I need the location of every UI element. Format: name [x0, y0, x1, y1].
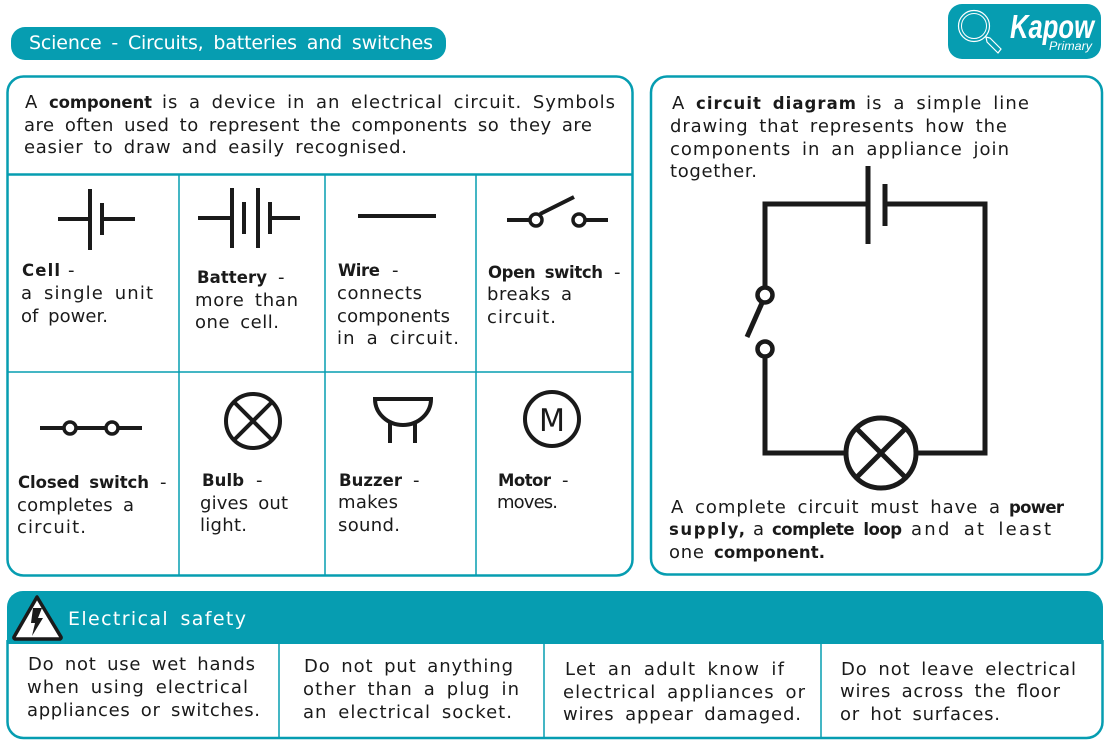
closed switch label: - — [160, 472, 166, 493]
icon: high voltage warning triangle — [14, 597, 61, 639]
component intro text: A — [25, 92, 38, 113]
open switch label: breaks a — [487, 284, 572, 305]
safety tip 2: Do not put anything — [304, 656, 513, 677]
battery label: one cell. — [195, 312, 279, 333]
circuit diagram — [747, 166, 985, 488]
buzzer label: Buzzer — [339, 471, 403, 490]
complete circuit text — [669, 497, 1065, 563]
motor label: - — [562, 470, 568, 491]
title banner — [11, 27, 446, 60]
component intro text: is a device in an electrical circuit. Symbols — [162, 92, 615, 113]
motor label: Motor — [498, 471, 552, 490]
complete circuit text: supply, — [669, 520, 745, 539]
wire label: - — [392, 260, 398, 281]
icon: motor symbol: M — [539, 403, 565, 439]
complete circuit text: and at least — [911, 519, 1051, 540]
closed switch label — [17, 472, 166, 538]
icon: wire symbol — [358, 214, 436, 218]
complete circuit text: component. — [714, 543, 825, 562]
open switch label — [487, 262, 620, 328]
complete circuit text: complete loop — [772, 520, 902, 539]
component intro text — [24, 92, 615, 158]
safety heading: Electrical safety — [68, 608, 246, 630]
wire label: connects — [337, 283, 422, 304]
safety tip 4: wires across the floor — [840, 681, 1061, 702]
circuit diagram intro text: together. — [670, 161, 757, 182]
bulb label: - — [256, 470, 262, 491]
logo: Kapow Primary — [948, 4, 1101, 59]
safety tip 3: wires appear damaged. — [563, 704, 801, 725]
circuit diagram intro text: drawing that represents how the — [670, 116, 1007, 137]
cell label: a single unit — [21, 283, 153, 304]
panel: electrical safety — [7, 591, 1103, 738]
icon: motor symbol — [525, 392, 579, 446]
buzzer label: - — [413, 470, 420, 491]
bulb label: Bulb — [202, 471, 244, 490]
circuit diagram intro text — [670, 93, 1029, 182]
complete circuit text: a — [753, 519, 764, 540]
closed switch label: Closed switch — [18, 473, 149, 492]
battery label: Battery — [197, 268, 267, 287]
buzzer label: makes — [338, 492, 398, 513]
safety tip 1 — [27, 654, 260, 721]
battery label: more than — [195, 290, 298, 311]
logo: Kapow Primary: Primary — [1049, 39, 1093, 53]
safety tip 4: or hot surfaces. — [840, 704, 1000, 725]
open switch label: - — [614, 262, 620, 283]
icon: bulb symbol — [226, 394, 280, 448]
title banner: Science - Circuits, batteries and switches — [29, 32, 433, 54]
cell label: Cell — [22, 261, 60, 280]
panel: components — [8, 76, 632, 576]
icon: cell symbol — [58, 189, 135, 250]
icon: buzzer symbol — [375, 399, 431, 443]
icon: battery symbol — [198, 188, 300, 248]
panel: circuit diagram — [651, 76, 1102, 574]
motor label: moves. — [497, 492, 558, 513]
buzzer label — [338, 470, 420, 536]
safety tip 4 — [840, 659, 1076, 725]
circuit diagram intro text: circuit diagram — [696, 94, 856, 113]
buzzer label: sound. — [338, 515, 400, 536]
safety tip 2: an electrical socket. — [303, 702, 512, 723]
icon: closed switch symbol — [40, 422, 142, 434]
safety tip 3 — [563, 659, 806, 725]
circuit diagram intro text: components in an appliance join — [670, 139, 1009, 160]
closed switch label: circuit. — [17, 517, 86, 538]
cell label: - — [68, 260, 74, 281]
wire label: components — [337, 306, 450, 327]
safety tip 2: other than a plug in — [303, 679, 519, 700]
safety tip 3: Let an adult know if — [565, 659, 785, 680]
complete circuit text: A complete circuit must have a — [671, 497, 1000, 518]
safety tip 3: electrical appliances or — [563, 682, 806, 703]
wire label: Wire — [338, 261, 380, 280]
circuit diagram intro text: A — [672, 93, 685, 114]
closed switch label: completes a — [17, 495, 134, 516]
battery label — [195, 267, 298, 333]
circuit diagram intro text: is a simple line — [866, 93, 1029, 114]
cell label — [21, 260, 153, 327]
motor label — [497, 470, 568, 513]
safety tip 1: appliances or switches. — [27, 700, 260, 721]
cell label: of power. — [21, 306, 108, 327]
bulb label: light. — [200, 515, 247, 536]
complete circuit text: one — [669, 542, 704, 563]
icon: open switch symbol — [507, 197, 608, 226]
battery label: - — [278, 267, 284, 288]
component intro text: are often used to represent the components so they are — [24, 115, 592, 136]
safety tip 4: Do not leave electrical — [841, 659, 1076, 680]
safety tip 2 — [303, 656, 519, 723]
wire label: in a circuit. — [337, 328, 459, 349]
component intro text: easier to draw and easily recognised. — [24, 137, 407, 158]
wire label — [337, 260, 459, 349]
safety tip 1: Do not use wet hands — [28, 654, 255, 675]
safety tip 1: when using electrical — [27, 677, 248, 698]
bulb label: gives out — [200, 493, 288, 514]
bulb label — [200, 470, 288, 536]
open switch label: Open switch — [488, 263, 603, 282]
complete circuit text: power — [1009, 498, 1065, 517]
open switch label: circuit. — [487, 307, 556, 328]
component intro text: component — [49, 93, 152, 112]
